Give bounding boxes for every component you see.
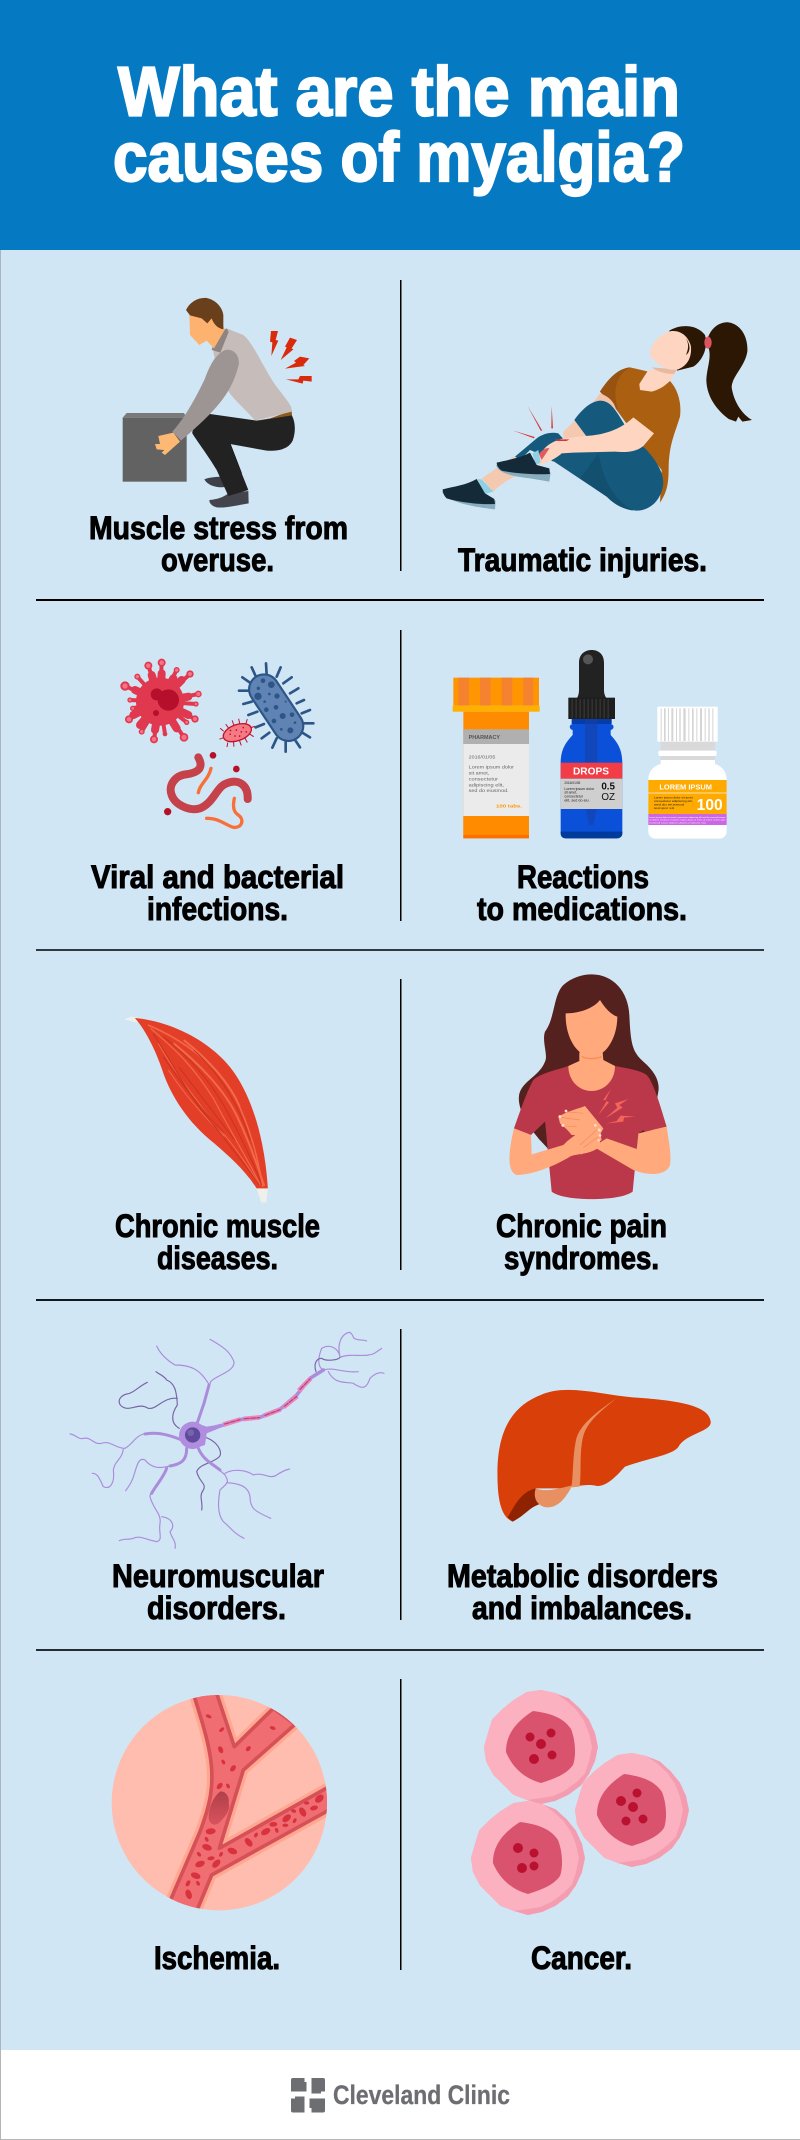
icon: small pink bacterium (215, 714, 259, 752)
label: neuromuscular disorders: disorders. (147, 1590, 286, 1626)
icon: white bottle: Lorem ipsum dolor sit amet (654, 796, 693, 800)
label: chronic muscle diseases: Chronic muscle (115, 1208, 320, 1244)
label: metabolic disorders: and imbalances. (472, 1590, 692, 1626)
title: causes of myalgia? (113, 118, 685, 196)
label: chronic pain syndromes: Chronic pain (496, 1208, 667, 1244)
icon: orange pill bottle: 100 tabs. (496, 804, 523, 810)
icon: blue dropper bottle: sit amet, (564, 791, 577, 795)
label: neuromuscular disorders (112, 1558, 324, 1626)
icon: blue dropper bottle: 0.5 (601, 782, 616, 793)
icon: orange pill bottle: Lorem ipsum dolor (469, 765, 515, 770)
title (113, 52, 685, 196)
icon: woman holding injured ankle (442, 322, 752, 511)
icon: blue dropper bottle (561, 650, 622, 838)
icon: blue dropper bottle: Lorem ipsum dolor (564, 787, 595, 791)
icon: blue dropper bottle: consectetur (564, 795, 584, 799)
icon: orange pill bottle (453, 678, 540, 838)
label: metabolic disorders: Metabolic disorders (447, 1558, 718, 1594)
icon: orange pill bottle: consectetur (469, 776, 499, 781)
icon: white bottle: LOREM IPSUM (659, 782, 712, 791)
icon: white bottle: tempor sit (654, 806, 674, 810)
icon: white bottle: Lorem ipsum dolor sit amet consectetur adipiscing elit sed do eiusmod tempor (649, 816, 726, 819)
label: chronic muscle diseases (115, 1208, 320, 1276)
label: chronic muscle diseases: diseases. (157, 1240, 278, 1276)
label: muscle stress (89, 510, 348, 578)
panel: viral and bacterial infections (91, 659, 344, 927)
label: reactions to medications (477, 859, 687, 927)
icon: woman with chest pain (509, 974, 670, 1199)
label: viral and bacterial (91, 859, 344, 927)
label: metabolic disorders (447, 1558, 718, 1626)
icon: liver (497, 1390, 711, 1522)
panel: traumatic injuries (442, 322, 752, 578)
label: cancer: Cancer. (531, 1940, 632, 1976)
icon: orange pill bottle: PHARMACY (469, 735, 500, 741)
icon: white bottle: nostrud exercitation ullamco laboris nisi (649, 821, 707, 824)
icon: cancer cell 3 (472, 1802, 584, 1914)
title banner (0, 0, 800, 250)
icon: blue dropper bottle: 2016/01/05 (564, 781, 580, 785)
icon: red virus (120, 659, 202, 743)
icon: blood vessel with clot (112, 1688, 333, 1915)
icon: white bottle: incididunt ut labore et dolore magna aliqua ut enim ad minim veniam quis (649, 819, 725, 822)
icon: neuron (70, 1332, 384, 1548)
icon: orange pill bottle: 2016/01/05 (469, 755, 496, 760)
label: viral and bacterial: Viral and bacterial (91, 859, 344, 895)
panel: ischemia (112, 1688, 333, 1976)
panel: chronic pain syndromes (496, 974, 670, 1276)
label: chronic pain syndromes (496, 1208, 667, 1276)
icon: white bottle: sed do eiusmod (654, 802, 684, 806)
icon: muscle (124, 1017, 268, 1202)
label: neuromuscular disorders: Neuromuscular (112, 1558, 324, 1594)
label: chronic pain syndromes: syndromes. (504, 1240, 659, 1276)
icon: white bottle (648, 707, 727, 839)
label: muscle stress: overuse. (161, 542, 274, 578)
label: reactions to medications: to medications. (477, 891, 687, 927)
label: reactions to medications: Reactions (517, 859, 649, 895)
icon: white bottle: 100 (697, 797, 723, 814)
wordmark: Cleveland Clinic (333, 2080, 510, 2110)
icon: blue dropper bottle: elit, sed do eiu. (564, 799, 590, 803)
label: muscle stress: Muscle stress from (89, 510, 348, 546)
title: What are the main (118, 52, 680, 130)
panel: neuromuscular disorders (70, 1332, 384, 1626)
icon: worms (164, 752, 248, 827)
panel: metabolic disorders and imbalances (447, 1390, 718, 1626)
label: viral and bacterial: infections. (147, 891, 288, 927)
icon: blue dropper bottle: DROPS (573, 766, 610, 777)
icon: cancer cell 2 (576, 1754, 688, 1866)
icon: Cleveland Clinic cross (291, 2078, 325, 2112)
icon: cancer cell 1 (485, 1691, 597, 1803)
panel: chronic muscle diseases (115, 1017, 320, 1276)
icon: orange pill bottle: sit amet, (469, 770, 489, 775)
panel: muscle stress from overuse (89, 298, 348, 578)
icon: medication bottles (453, 650, 727, 839)
panel: reactions to medications (453, 650, 727, 927)
icon: orange pill bottle: adipiscing elit, (469, 782, 504, 787)
icon: man lifting box with back pain (123, 298, 312, 508)
icon: orange pill bottle: sed do eiusmod. (469, 788, 509, 793)
label: traumatic injuries: Traumatic injuries. (458, 542, 707, 578)
panel: cancer (472, 1691, 688, 1976)
icon: blue bacterium (239, 663, 313, 752)
label: ischemia: Ischemia. (154, 1940, 280, 1976)
icon: white bottle: consectetur adipiscing elit, (654, 799, 693, 803)
logo: Cleveland Clinic (291, 2078, 510, 2112)
icon: blue dropper bottle: OZ (601, 792, 615, 803)
icon: virus, bacteria and worms (120, 659, 313, 827)
